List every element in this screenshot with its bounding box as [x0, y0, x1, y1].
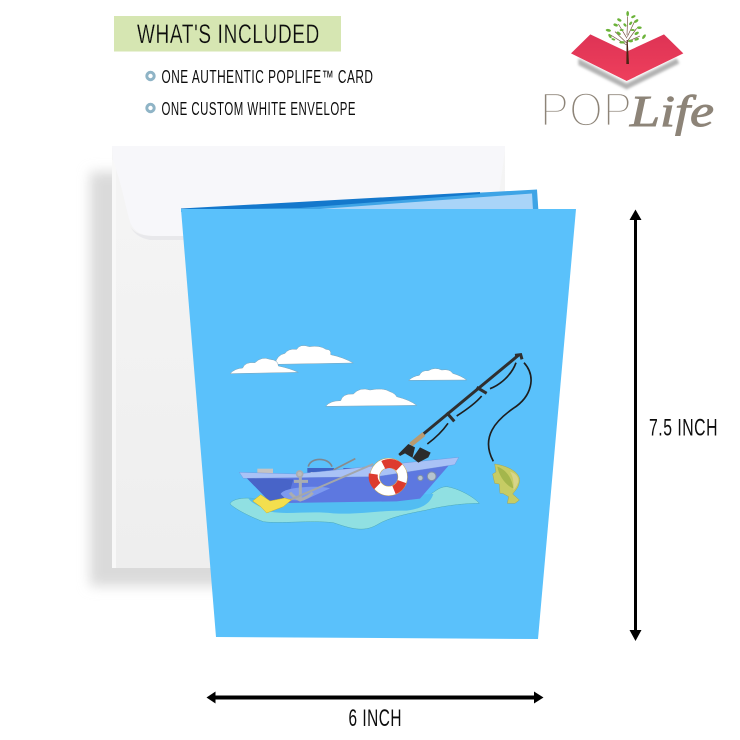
envelope shadow: [90, 172, 440, 586]
seat and handle: [308, 459, 332, 467]
arrow: height: [630, 210, 642, 641]
reel: [398, 444, 431, 463]
list: included items: ONE CUSTOM WHITE ENVELOPE: [162, 99, 356, 119]
fish: [493, 464, 520, 503]
rod handle: [411, 434, 424, 445]
envelope flap: [112, 146, 505, 236]
card back cover: [181, 190, 538, 212]
list: included items: ONE AUTHENTIC POPLIFE™ CARD: [162, 67, 374, 87]
label: width: 6 INCH: [348, 705, 402, 732]
hull: [246, 464, 450, 503]
heading: what's included: [114, 16, 341, 52]
icon: tree: [605, 11, 647, 64]
logo: PopLife: [540, 11, 714, 137]
arrow: width: [206, 692, 544, 704]
life ring: [373, 463, 403, 491]
oar: [288, 464, 373, 501]
card front cover: [181, 209, 576, 639]
envelope body: [112, 146, 505, 568]
clouds: [230, 345, 467, 406]
list: included items: [147, 67, 374, 119]
icon: red open book: [571, 34, 683, 89]
card inner page: [320, 194, 533, 210]
motor box: [257, 469, 273, 474]
water: [230, 487, 479, 529]
fishing rod: [398, 355, 531, 503]
anchor: [290, 471, 313, 500]
portholes: [418, 475, 423, 481]
pop-up card: [181, 190, 576, 639]
logo wordmark: POP: POP: [540, 84, 632, 137]
logo wordmark: Life: Life: [629, 87, 714, 136]
fishing line: [427, 363, 531, 461]
gunwale: [239, 457, 459, 478]
boat: [239, 457, 459, 513]
envelope: [90, 146, 505, 586]
heading: what's included: WHAT'S INCLUDED: [137, 19, 320, 49]
